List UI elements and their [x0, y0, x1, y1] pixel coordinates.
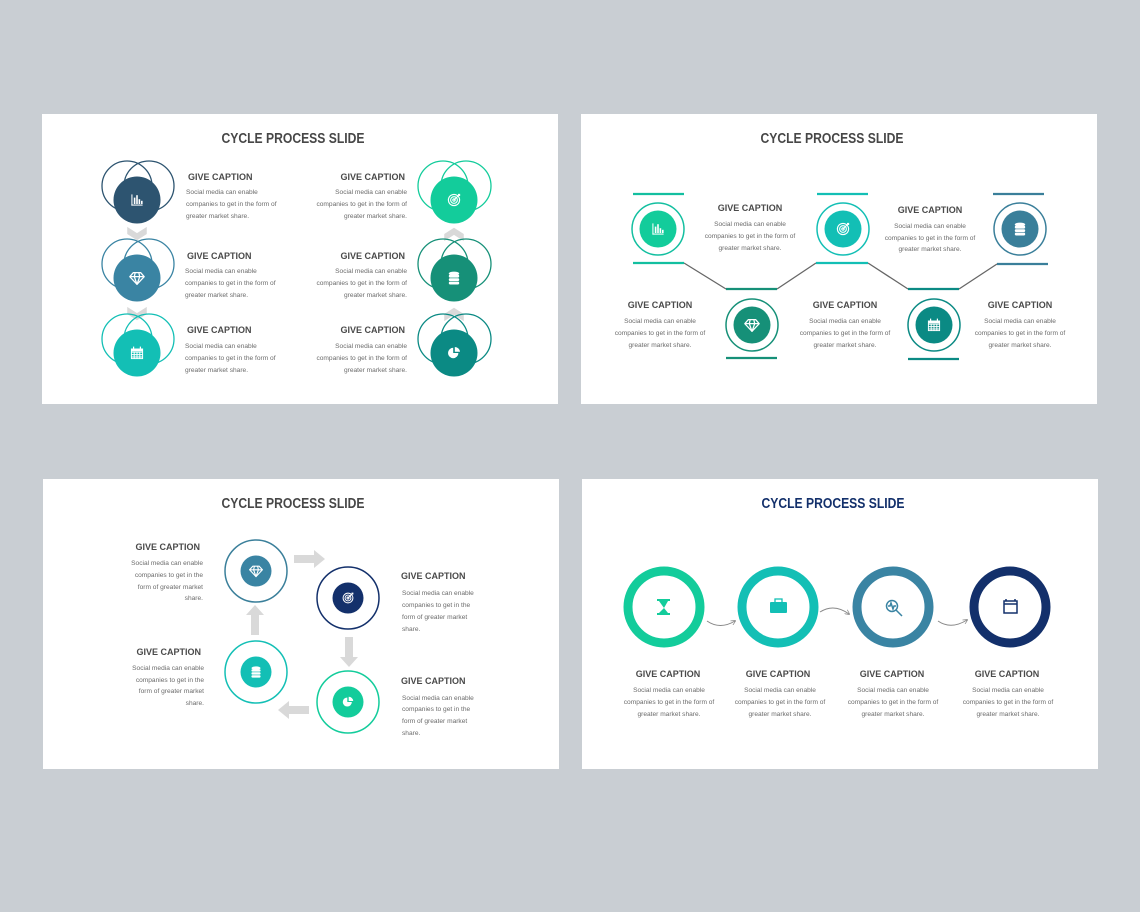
text: caption 4: GIVE CAPTION	[975, 669, 1039, 679]
node: target	[317, 567, 379, 629]
text: bottom caption 1	[615, 300, 705, 349]
text: bottom caption 1: GIVE CAPTION	[628, 300, 692, 310]
arrow: curved 2	[820, 608, 849, 614]
text: caption 6	[316, 172, 407, 220]
arrow: down	[340, 637, 358, 667]
panel: slide 4 (horizontal ring process)	[582, 479, 1098, 769]
text: top caption 2	[885, 205, 975, 253]
step 3: target node	[817, 203, 869, 255]
text: caption top-right	[401, 571, 474, 633]
title: slide 3: CYCLE PROCESS SLIDE	[222, 496, 365, 512]
text: caption 2	[735, 669, 825, 718]
arrow: left	[278, 701, 309, 719]
text: caption top-right: share.	[402, 626, 420, 633]
text: bottom caption 3: GIVE CAPTION	[988, 300, 1052, 310]
text: top caption 1: Social media can enable	[714, 221, 786, 228]
arrow: chevron down 1	[127, 227, 147, 240]
ring 4: browser window	[974, 571, 1046, 643]
text: top caption 1: GIVE CAPTION	[718, 203, 782, 213]
text: bottom caption 2: greater market share.	[813, 342, 877, 349]
title: slide 1: CYCLE PROCESS SLIDE	[222, 131, 365, 147]
text: top caption 2: GIVE CAPTION	[898, 205, 962, 215]
text: caption 3	[848, 669, 938, 718]
text: caption 6: companies to get in the form of	[316, 201, 407, 208]
text: caption 1: companies to get in the form of	[624, 699, 714, 706]
text: caption 3: Social media can enable	[185, 343, 257, 350]
text: caption bottom-left	[132, 647, 204, 707]
text: caption top-left: companies to get in the	[135, 572, 203, 579]
zigzag connector line	[684, 263, 997, 289]
text: caption 4: companies to get in the form of	[963, 699, 1053, 706]
ring 3: magnifier	[857, 571, 929, 643]
text: bottom caption 3: Social media can enable	[984, 318, 1056, 325]
text: caption 2: GIVE CAPTION	[187, 251, 252, 261]
text: caption bottom-right	[401, 676, 474, 737]
text: bottom caption 2	[800, 300, 890, 349]
text: caption bottom-left: share.	[186, 700, 204, 707]
arrow: right	[294, 550, 325, 568]
text: bottom caption 2: GIVE CAPTION	[813, 300, 877, 310]
panel: slide 2 (zigzag timeline)	[581, 114, 1097, 404]
text: caption 6: GIVE CAPTION	[340, 172, 405, 182]
arrow: up	[246, 605, 264, 635]
text: caption bottom-right: companies to get in the	[402, 706, 471, 713]
text: caption 5	[316, 251, 407, 299]
text: caption top-left	[131, 542, 203, 602]
text: caption 4	[316, 325, 407, 374]
text: caption 1: companies to get in the form of	[186, 201, 277, 208]
text: caption 4: greater market share.	[344, 367, 407, 374]
arrow: curved 1	[707, 621, 735, 626]
text: caption 3: Social media can enable	[857, 687, 929, 694]
text: caption 4: greater market share.	[976, 711, 1040, 718]
panel: slide 3 (four-node cycle)	[43, 479, 559, 769]
text: caption top-left: share.	[185, 595, 203, 602]
step 4: calendar node	[908, 299, 960, 351]
step 5: database node	[994, 203, 1046, 255]
text: caption bottom-left: companies to get in the	[136, 677, 204, 684]
text: caption 5: Social media can enable	[335, 268, 407, 275]
text: caption bottom-right: Social media can enable	[402, 695, 474, 702]
text: top caption 1: greater market share.	[718, 245, 782, 252]
text: caption 4: Social media can enable	[972, 687, 1044, 694]
text: caption 6: Social media can enable	[335, 189, 407, 196]
text: caption top-right: GIVE CAPTION	[401, 571, 466, 581]
text: caption 1: GIVE CAPTION	[188, 172, 253, 182]
step 5: database circle	[418, 239, 491, 302]
text: caption top-left: Social media can enable	[131, 560, 203, 567]
panel: slide 1 (venn column layout)	[42, 114, 558, 404]
arrow: chevron up 2	[444, 308, 464, 321]
text: caption 1	[186, 172, 277, 220]
text: caption bottom-left: GIVE CAPTION	[136, 647, 201, 657]
text: top caption 2: companies to get in the form of	[885, 235, 975, 242]
bars: horizontal accents	[633, 194, 1048, 359]
text: caption bottom-right: share.	[402, 730, 420, 737]
text: bottom caption 3: greater market share.	[988, 342, 1052, 349]
node: diamond	[225, 540, 287, 602]
arrow: curved 3	[938, 620, 967, 625]
text: top caption 1: companies to get in the form of	[705, 233, 795, 240]
text: bottom caption 1: companies to get in the form of	[615, 330, 705, 337]
text: bottom caption 3: companies to get in the form of	[975, 330, 1065, 337]
text: caption 2: GIVE CAPTION	[746, 669, 810, 679]
ring 2: briefcase	[742, 571, 814, 643]
text: caption 1: Social media can enable	[186, 189, 258, 196]
text: caption 1: greater market share.	[637, 711, 701, 718]
step 1: bar chart circle	[102, 161, 174, 224]
text: caption 4	[963, 669, 1053, 718]
text: caption bottom-right: form of greater market	[402, 718, 467, 725]
text: bottom caption 1: greater market share.	[628, 342, 692, 349]
node: pie	[317, 671, 379, 733]
text: caption 2: Social media can enable	[744, 687, 816, 694]
text: top caption 1	[705, 203, 795, 252]
text: caption top-left: form of greater market	[138, 584, 203, 591]
text: caption 2: greater market share.	[748, 711, 812, 718]
text: bottom caption 1: Social media can enable	[624, 318, 696, 325]
text: caption 4: Social media can enable	[335, 343, 407, 350]
text: bottom caption 2: companies to get in the form of	[800, 330, 890, 337]
text: caption bottom-right: GIVE CAPTION	[401, 676, 466, 686]
text: caption top-right: form of greater market	[402, 614, 467, 621]
text: caption 2: Social media can enable	[185, 268, 257, 275]
title: slide 4: CYCLE PROCESS SLIDE	[762, 496, 905, 512]
arrow: chevron up 1	[444, 228, 464, 241]
text: caption 3: companies to get in the form of	[185, 355, 276, 362]
text: caption 1: Social media can enable	[633, 687, 705, 694]
text: caption 3: GIVE CAPTION	[860, 669, 924, 679]
text: caption 1	[624, 669, 714, 718]
node: database	[225, 641, 287, 703]
text: caption 4: GIVE CAPTION	[340, 325, 405, 335]
text: bottom caption 3	[975, 300, 1065, 349]
text: caption 1: GIVE CAPTION	[636, 669, 700, 679]
text: caption 3: greater market share.	[861, 711, 925, 718]
text: caption 4: companies to get in the form of	[316, 355, 407, 362]
text: bottom caption 2: Social media can enable	[809, 318, 881, 325]
text: caption 1: greater market share.	[186, 213, 249, 220]
text: caption 2: greater market share.	[185, 292, 248, 299]
text: caption 2: companies to get in the form of	[185, 280, 276, 287]
text: caption top-left: GIVE CAPTION	[135, 542, 200, 552]
text: caption 5: companies to get in the form of	[316, 280, 407, 287]
step 6: target circle	[418, 161, 491, 224]
text: top caption 2: greater market share.	[898, 246, 962, 253]
ring 1: hourglass	[628, 571, 700, 643]
text: caption 2	[185, 251, 276, 299]
text: top caption 2: Social media can enable	[894, 223, 966, 230]
text: caption 3	[185, 325, 276, 374]
text: caption 3: GIVE CAPTION	[187, 325, 252, 335]
text: caption 2: companies to get in the form of	[735, 699, 825, 706]
text: caption 3: companies to get in the form of	[848, 699, 938, 706]
step 2: diamond circle	[102, 239, 174, 302]
text: caption 6: greater market share.	[344, 213, 407, 220]
title: slide 2: CYCLE PROCESS SLIDE	[760, 131, 904, 147]
text: caption 3: greater market share.	[185, 367, 248, 374]
step 2: diamond node	[726, 299, 778, 351]
text: caption 5: GIVE CAPTION	[340, 251, 405, 261]
text: caption 5: greater market share.	[344, 292, 407, 299]
step 4: pie circle	[418, 314, 491, 376]
text: caption top-right: companies to get in the	[402, 602, 471, 609]
text: caption bottom-left: form of greater market	[139, 688, 204, 695]
text: caption bottom-left: Social media can enable	[132, 665, 204, 672]
text: caption top-right: Social media can enable	[402, 590, 474, 597]
step 1: bar chart node	[632, 203, 684, 255]
step 3: calendar circle	[102, 314, 174, 376]
arrow: chevron down 2	[127, 307, 147, 320]
